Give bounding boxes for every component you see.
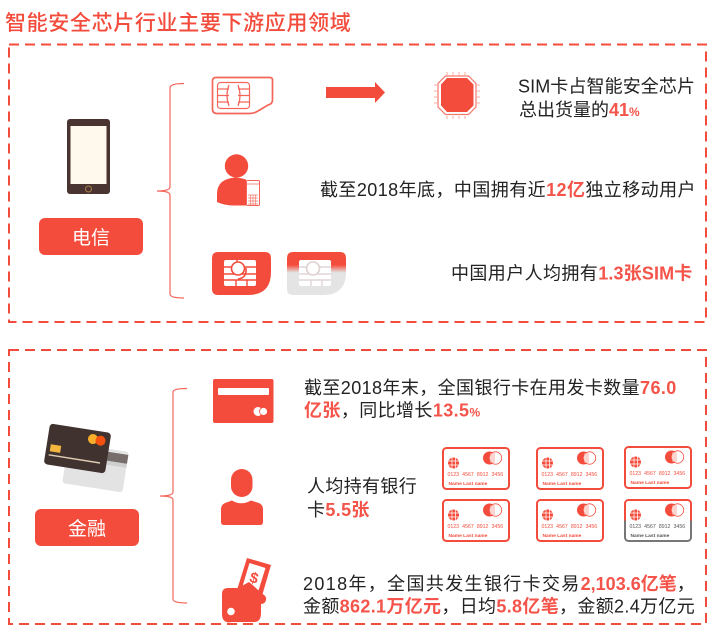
chart: card pictogram row 1 card 1 [443, 448, 509, 489]
label: finance [35, 509, 139, 546]
chart: card pictogram row 1 card 2: Name Last name [542, 481, 582, 487]
chart: card pictogram row 1 card 2 [537, 448, 603, 489]
chart: card pictogram row 1 card 1: 0123 4567 8912 3456 [448, 472, 503, 478]
icon: chip [434, 72, 480, 119]
title: 智能安全芯片行业主要下游应用领域 [5, 12, 351, 35]
label: telecom [39, 218, 143, 255]
icon: person [221, 469, 263, 525]
text: SIM per user: 中国用户人均拥有1.3张SIM卡 [451, 264, 692, 284]
icon: bank cards [44, 423, 129, 493]
icon: SIM gradient [287, 252, 346, 295]
chart: card pictogram row 1 card 3 [625, 447, 691, 488]
chart: card pictogram row 2 card 3 partial: Name Last name [630, 533, 670, 539]
chart: card pictogram row 2 card 1: Name Last name [448, 533, 488, 539]
chart: card pictogram row 1 card 3: 0123 4567 8912 3456 [630, 471, 685, 477]
chart: card pictogram row 1 card 2: 0123 4567 8912 3456 [542, 472, 597, 478]
bracket [160, 388, 187, 603]
panel: finance [9, 350, 706, 624]
chart: card pictogram row 2 card 2: Name Last name [542, 533, 582, 539]
text: cards per person: 人均持有银行 [307, 476, 417, 496]
chart: card pictogram row 2 card 1: 0123 4567 8912 3456 [448, 524, 503, 530]
arrow [326, 82, 385, 103]
text: SIM share: 总出货量的41% [519, 100, 640, 120]
bracket [157, 84, 184, 298]
icon: credit card [213, 379, 274, 423]
text: transactions: 金额862.1万亿元，日均5.8亿笔，金额2.4万亿元 [303, 596, 695, 616]
chart: card pictogram row 2 card 3 partial [625, 500, 691, 541]
text: card count: 截至2018年末，全国银行卡在用发卡数量76.0 [304, 378, 677, 398]
panel: telecom [9, 44, 706, 322]
text: cards per person: 卡5.5张 [307, 500, 370, 520]
label: telecom: 电信 [72, 227, 110, 249]
label: finance: 金融 [68, 518, 106, 540]
icon: SIM outline [212, 78, 272, 114]
chart: card pictogram row 1 card 1: Name Last name [448, 481, 488, 487]
text: transactions [303, 574, 695, 616]
text: cards per person [307, 476, 417, 520]
chart: card pictogram row 2 card 3 partial: 0123 4567 8912 3456 [630, 524, 685, 530]
icon: mobile user [217, 154, 260, 206]
text: SIM share: SIM卡占智能安全芯片 [518, 76, 695, 96]
icon: hand holding money [222, 558, 271, 622]
chart: card pictogram row 2 card 1 [443, 500, 509, 541]
text: card count [304, 378, 677, 420]
icon: smartphone [67, 119, 110, 194]
text: card count: 亿张，同比增长13.5% [304, 400, 481, 420]
chart: card pictogram row 2 card 2 [537, 500, 603, 541]
icon: hand holding money: $ [248, 569, 261, 588]
chart: card pictogram row 2 card 2: 0123 4567 8912 3456 [542, 524, 597, 530]
chart: card pictogram row 1 card 3: Name Last name [630, 480, 670, 486]
text: SIM share [518, 76, 695, 120]
icon: SIM filled [212, 252, 271, 295]
text: mobile users: 截至2018年底，中国拥有近12亿独立移动用户 [320, 180, 696, 200]
text: transactions: 2018年，全国共发生银行卡交易2,103.6亿笔， [303, 574, 695, 594]
